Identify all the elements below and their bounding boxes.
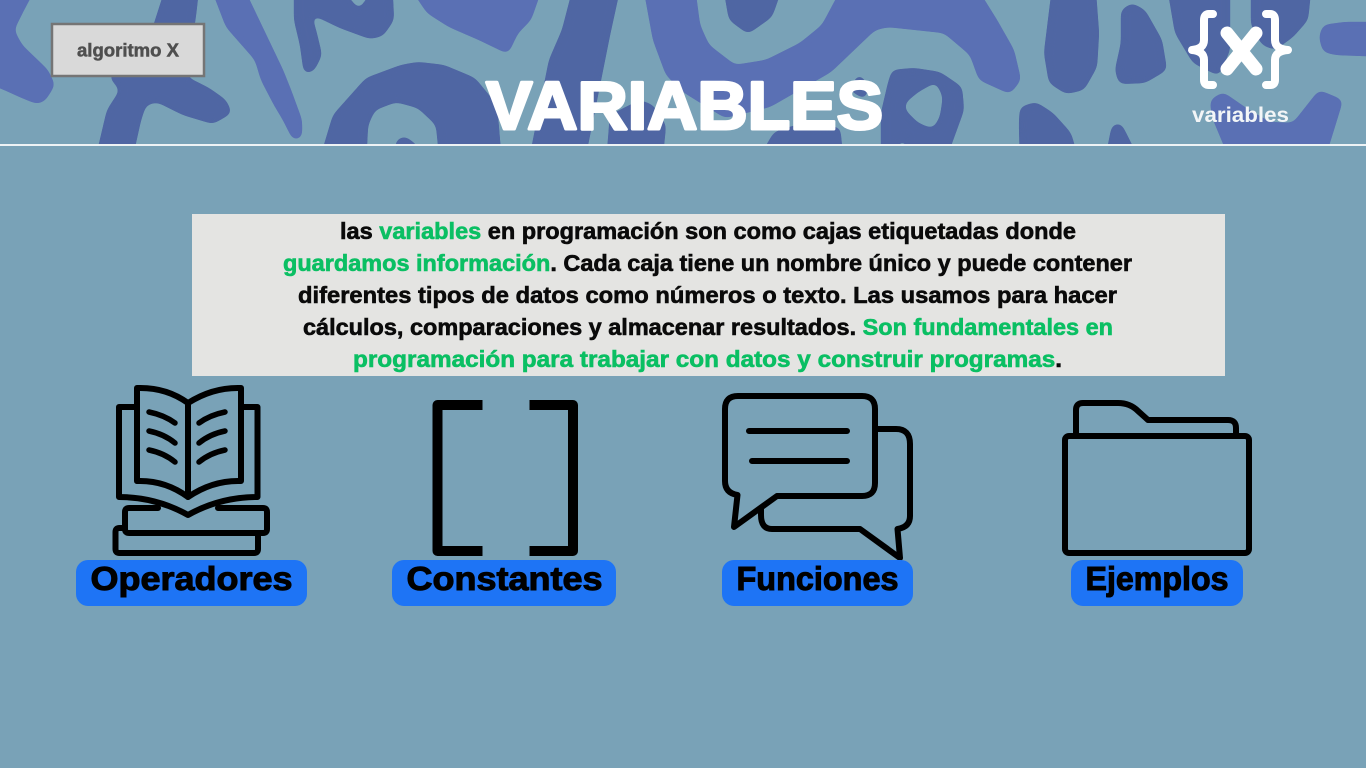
icon: square brackets bbox=[438, 405, 573, 551]
icon: curly braces x logo with caption: variables bbox=[1192, 104, 1289, 127]
label: Constantes: Constantes bbox=[406, 560, 602, 597]
icon: open book on stacked books bbox=[116, 388, 267, 553]
label: Operadores bbox=[76, 560, 307, 606]
label: Funciones: Funciones bbox=[736, 560, 898, 597]
header divider line bbox=[0, 144, 1366, 146]
icon: chat bubbles bbox=[725, 396, 910, 558]
panel: definition text: programación para trabajar con datos y construir programas . bbox=[353, 346, 1062, 372]
icon: folder bbox=[1065, 403, 1249, 553]
panel: definition text: guardamos información. Cada caja tiene un nombre único y puede contener bbox=[283, 250, 1132, 276]
title: VARIABLES bbox=[486, 68, 883, 144]
label: Funciones bbox=[722, 560, 913, 606]
panel: definition text: cálculos, comparaciones y almacenar resultados. Son fundamentales en bbox=[303, 314, 1113, 340]
icon: curly braces x logo with caption bbox=[1192, 14, 1289, 127]
label: Constantes bbox=[392, 560, 616, 606]
label: Ejemplos: Ejemplos bbox=[1086, 560, 1228, 597]
panel: definition text bbox=[192, 214, 1225, 376]
label: Ejemplos bbox=[1071, 560, 1243, 606]
brand badge: algoritmo X bbox=[52, 24, 204, 76]
panel: definition text: las variables en programación son como cajas etiquetadas donde bbox=[340, 218, 1076, 244]
header pattern: organic blobs bbox=[0, 0, 1366, 144]
label: Operadores: Operadores bbox=[90, 560, 292, 597]
panel: definition text: diferentes tipos de datos como números o texto. Las usamos para hacer bbox=[298, 282, 1117, 308]
brand badge: algoritmo X: algoritmo X bbox=[77, 40, 179, 60]
